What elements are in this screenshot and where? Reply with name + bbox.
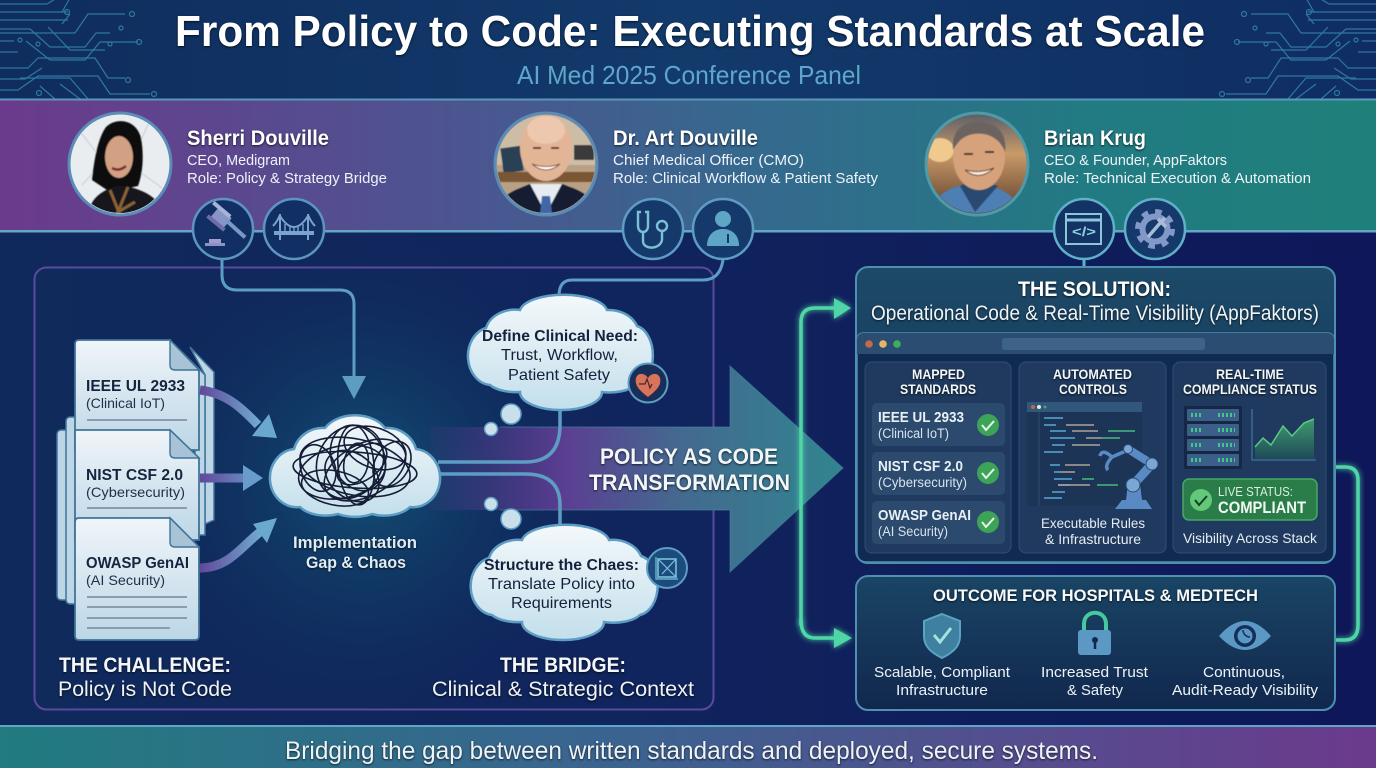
circuit decoration left bbox=[0, 0, 156, 99]
footer text: Bridging the gap between written standards and deployed, secure systems. bbox=[285, 737, 1098, 765]
outcome label: continuous bbox=[1172, 664, 1319, 699]
card: mapped standards: STANDARDS bbox=[900, 381, 976, 397]
card: mapped standards: MAPPED bbox=[912, 366, 965, 382]
document: IEEE UL 2933 bbox=[75, 340, 199, 450]
caption: executable rules bbox=[1041, 515, 1145, 547]
outcome label: trust bbox=[1041, 664, 1149, 699]
cloud: structure the chaos: Requirements bbox=[511, 595, 612, 612]
row: IEEE bbox=[872, 403, 1005, 446]
cloud: structure the chaos: Translate Policy into bbox=[488, 576, 635, 593]
heading: outcome: OUTCOME FOR HOSPITALS & MEDTECH bbox=[933, 586, 1258, 605]
cloud: structure the chaos bbox=[471, 525, 658, 640]
role line: Role: Policy & Strategy Bridge bbox=[187, 170, 387, 187]
document: OWASP GenAI: OWASP GenAI bbox=[86, 555, 189, 572]
icon: gavel bbox=[193, 199, 253, 259]
stack: policy documents bbox=[57, 340, 214, 640]
heading: the bridge: Clinical & Strategic Context bbox=[432, 678, 694, 701]
heading: the challenge: Policy is Not Code bbox=[58, 678, 232, 701]
card: automated controls bbox=[1019, 362, 1166, 553]
name: Dr. Art Douville bbox=[613, 127, 758, 150]
connector: chaos cloud to clinical cloud bbox=[438, 408, 560, 462]
stacked pages behind bbox=[57, 345, 214, 604]
name: Sherri Douville bbox=[187, 127, 329, 150]
line chart bbox=[1252, 409, 1316, 460]
speaker band bbox=[0, 98, 1376, 232]
green arrow: to outcome bbox=[801, 620, 852, 648]
heading: the challenge bbox=[58, 654, 232, 701]
label: implementation gap bbox=[293, 534, 417, 572]
thought dots: structure bbox=[484, 498, 521, 529]
row: OWASP: OWASP GenAI bbox=[878, 507, 971, 524]
title: From Policy to Code: Executing Standards at Scale bbox=[175, 7, 1205, 56]
outcome label: continuous: Continuous, bbox=[1203, 664, 1285, 681]
card: real-time compliance status: COMPLIANCE STATUS bbox=[1183, 381, 1317, 397]
code window bbox=[1027, 402, 1142, 506]
cloud: implementation gap and chaos bbox=[270, 413, 440, 517]
portrait: Brian Krug bbox=[925, 113, 1028, 220]
icon: shield bbox=[924, 614, 960, 658]
speaker: Sherri Douville bbox=[69, 113, 387, 220]
role line: Role: Clinical Workflow & Patient Safety bbox=[613, 170, 878, 187]
caption: visibility: Visibility Across Stack bbox=[1183, 530, 1318, 546]
panel: left challenge and bridge bbox=[34, 268, 714, 710]
connector: chaos cloud to structure cloud bbox=[438, 474, 560, 525]
circuit decoration right bbox=[1220, 0, 1376, 99]
row: NIST: (Cybersecurity) bbox=[878, 475, 967, 490]
cloud: define clinical need bbox=[468, 295, 653, 410]
thought dots: clinical bbox=[484, 404, 521, 436]
document: NIST CSF 2.0: (Cybersecurity) bbox=[86, 484, 185, 500]
live status badge: LIVE STATUS: bbox=[1218, 484, 1293, 499]
document: IEEE UL 2933: IEEE UL 2933 bbox=[86, 378, 185, 395]
big arrow: policy as code bbox=[430, 366, 843, 572]
document: NIST CSF 2.0 bbox=[75, 430, 199, 540]
icon: code window bbox=[1054, 199, 1114, 259]
title line: CEO & Founder, AppFaktors bbox=[1044, 152, 1227, 169]
icon: blueprint bbox=[647, 548, 687, 588]
document: IEEE UL 2933: (Clinical IoT) bbox=[86, 395, 165, 411]
browser window bbox=[857, 333, 1334, 562]
card: real-time compliance status bbox=[1173, 362, 1326, 553]
card: real-time compliance status: REAL-TIME bbox=[1216, 366, 1284, 382]
live status badge bbox=[1183, 479, 1317, 520]
speaker: Brian Krug bbox=[925, 113, 1311, 220]
cloud: define clinical need: Define Clinical Need: bbox=[482, 328, 638, 345]
label: implementation gap: Implementation bbox=[293, 534, 417, 552]
heading: the challenge: THE CHALLENGE: bbox=[59, 654, 231, 677]
outcome label: trust: & Safety bbox=[1067, 682, 1123, 699]
arrow: NIST to chaos bbox=[200, 465, 263, 491]
icon: bridge bbox=[264, 199, 324, 259]
connector: code icon to solution bbox=[1082, 259, 1086, 268]
portrait: Sherri Douville bbox=[69, 113, 171, 220]
heading: the solution: THE SOLUTION: bbox=[1018, 278, 1171, 301]
outcome label: continuous: Audit-Ready Visibility bbox=[1172, 682, 1319, 699]
cloud: define clinical need: Patient Safety bbox=[508, 367, 610, 384]
footer band bbox=[0, 725, 1376, 768]
arrow: IEEE to chaos bbox=[200, 390, 277, 438]
subheading: Operational Code & Real-Time Visibility (AppFaktors) bbox=[871, 302, 1319, 325]
green feedback line bbox=[1335, 467, 1358, 640]
outcome label: scalable: Infrastructure bbox=[896, 682, 988, 699]
server rack bbox=[1184, 406, 1242, 469]
header background bbox=[0, 0, 1376, 99]
cloud: define clinical need: Trust, Workflow, bbox=[501, 347, 618, 364]
row: OWASP: (AI Security) bbox=[878, 524, 948, 539]
role line: Role: Technical Execution & Automation bbox=[1044, 170, 1311, 187]
card: automated controls: AUTOMATED bbox=[1053, 366, 1132, 382]
caption: executable rules: & Infrastructure bbox=[1045, 531, 1141, 547]
icon: code window: </> bbox=[1072, 224, 1097, 239]
outcome label: trust: Increased Trust bbox=[1041, 664, 1149, 681]
card: mapped standards bbox=[865, 362, 1011, 553]
title line: CEO, Medigram bbox=[187, 152, 290, 169]
icon: heart pulse bbox=[628, 364, 668, 402]
connector: stethoscope to clinical cloud bbox=[559, 260, 723, 296]
outcome label: scalable bbox=[874, 664, 1011, 699]
outcome label: scalable: Scalable, Compliant bbox=[874, 664, 1011, 681]
icon: gear and wrench bbox=[1125, 199, 1185, 259]
icon: stethoscope bbox=[623, 199, 683, 259]
title line: Chief Medical Officer (CMO) bbox=[613, 152, 804, 169]
document: NIST CSF 2.0: NIST CSF 2.0 bbox=[86, 467, 183, 484]
speaker: Dr. Art Douville bbox=[495, 113, 878, 215]
cloud: structure the chaos: Structure the Chaes: bbox=[484, 557, 639, 574]
chaos scribble bbox=[292, 413, 419, 514]
green arrow: to solution bbox=[801, 298, 851, 625]
icon: eye bbox=[1219, 621, 1271, 650]
connector: gavel to chaos cloud bbox=[222, 260, 366, 399]
heading: the bridge: THE BRIDGE: bbox=[500, 654, 626, 677]
row: IEEE: (Clinical IoT) bbox=[878, 426, 949, 441]
row: NIST: NIST CSF 2.0 bbox=[878, 458, 963, 475]
panel: solution bbox=[856, 267, 1335, 563]
arrow label line 1: POLICY AS CODE bbox=[600, 444, 778, 469]
panel: outcome bbox=[856, 576, 1335, 710]
card: automated controls: CONTROLS bbox=[1059, 381, 1127, 397]
document: OWASP GenAI: (AI Security) bbox=[86, 572, 165, 588]
row: OWASP bbox=[872, 501, 1005, 544]
label: implementation gap: Gap & Chaos bbox=[306, 554, 406, 572]
portrait: Art Douville bbox=[495, 113, 598, 215]
icon: robot arm bbox=[1100, 444, 1158, 509]
arrow: OWASP to chaos bbox=[200, 518, 277, 568]
icon: clinician bbox=[693, 199, 753, 259]
subtitle: AI Med 2025 Conference Panel bbox=[517, 60, 861, 90]
icon: lock bbox=[1078, 613, 1111, 655]
caption: executable rules: Executable Rules bbox=[1041, 515, 1145, 531]
row: IEEE: IEEE UL 2933 bbox=[878, 409, 964, 426]
row: NIST bbox=[872, 452, 1005, 495]
document: OWASP GenAI bbox=[75, 518, 199, 640]
heading: the bridge bbox=[432, 654, 694, 701]
arrow label line 2: TRANSFORMATION bbox=[589, 470, 790, 495]
name: Brian Krug bbox=[1044, 127, 1146, 150]
live status badge: COMPLIANT bbox=[1218, 498, 1307, 517]
